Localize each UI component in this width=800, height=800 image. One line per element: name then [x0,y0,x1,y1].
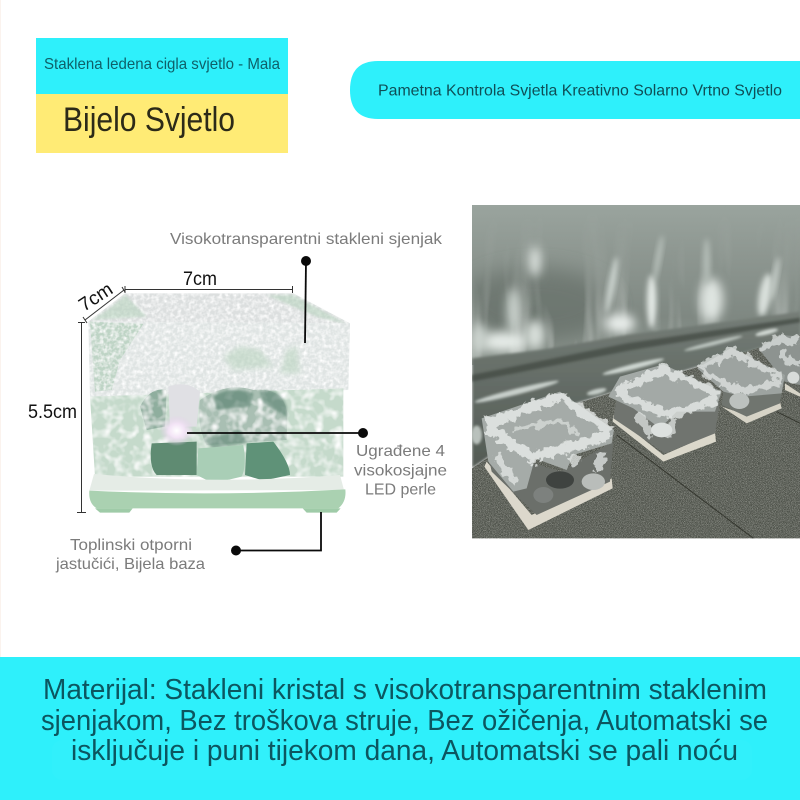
dimension: width 7cm: 7cm [183,269,217,290]
brick upper body [88,322,350,397]
carpet floor [472,335,800,538]
brick 1 [482,392,614,530]
product illustration: glass ice brick [88,293,350,513]
colour band: white light [36,94,288,153]
green patches in the shade [223,347,300,373]
callout: heat resistant pads and base [55,512,321,573]
callout: LED beads: LED perle [365,482,436,498]
brick top face [88,293,350,323]
callout: LED beads [187,428,447,498]
callout: glass shade [170,231,443,343]
brick 2 [608,364,722,462]
wall with light reflections [460,205,800,365]
footer band: material and features: sjenjakom, Bez troškova struje, Bez ožičenja, Automatski se [41,705,768,737]
callout: heat resistant pads and base: Toplinski otporni [70,537,192,554]
callout: heat resistant pads and base: jastučići, Bijela baza [55,556,205,573]
callout: LED beads: visokosjajne [354,462,447,480]
title band: product name [36,38,288,94]
header pill: product description [350,61,800,119]
footer band: material and features [0,657,800,800]
callout: glass shade: Visokotransparentni stakleni sjenjak [170,231,443,248]
green corner reflection [90,322,143,392]
panel: product title and colour [36,38,288,153]
footer band: material and features: isključuje i puni tijekom dana, Automatski se pali noću [71,735,738,767]
footer band: material and features: Materijal: Stakleni kristal s visokotransparentnim staklenim [43,674,767,706]
colour band: white light: Bijelo Svjetlo [63,101,235,139]
seams in carpet [617,412,800,538]
top face green corners [92,295,347,324]
skirting board [471,312,800,468]
header pill: product description: Pametna Kontrola Svjetla Kreativno Solarno Vrtno Svjetlo [378,82,782,100]
LED glow [159,415,194,446]
dimension: height 5.5cm: 5.5cm [28,402,77,423]
inner glass blocks [140,384,290,483]
brick base [89,474,346,513]
dimension: depth 7cm: 7cm [75,279,117,316]
brick 4, far right [758,335,800,397]
callout: LED beads: Ugrađene 4 [356,443,445,460]
brick lower body [90,388,343,477]
brick 3 [697,348,785,423]
photo: lit ice bricks along a wall [460,205,800,538]
title band: product name: Staklena ledena cigla svjetlo - Mala [44,56,280,73]
